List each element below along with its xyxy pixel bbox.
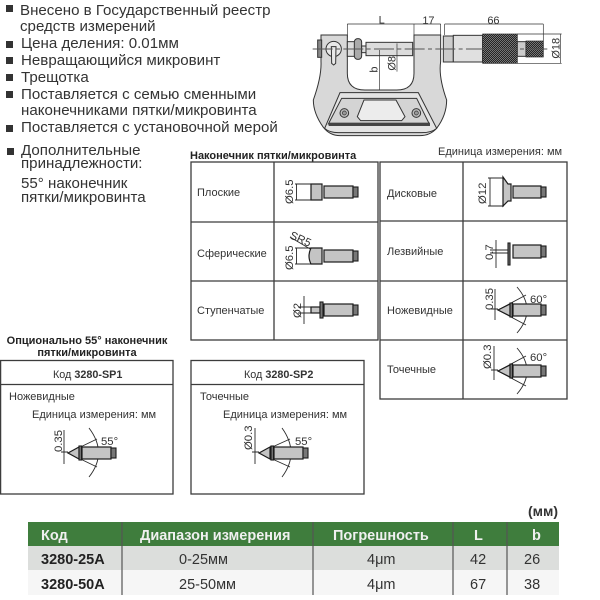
feature text: наконечниками пятки/микровинта [21, 102, 257, 119]
tip: blade: 0.7 [484, 244, 496, 260]
row 3280-50A [41, 577, 540, 593]
row 3280-50A: 3280-50A [41, 577, 105, 593]
tip: disc [387, 177, 546, 206]
table header [41, 528, 541, 544]
tip: flat [197, 180, 358, 204]
centre line [313, 47, 548, 50]
tip drawing SP1: 55° [101, 436, 118, 448]
tip: knife: 60° [530, 294, 547, 306]
dimension labels: Ø18 [550, 38, 562, 59]
features list [6, 2, 278, 206]
dimension labels: Ø8 [386, 56, 398, 71]
feature text: Поставляется с установочной мерой [21, 119, 278, 136]
tip: spherical: SR5 [288, 230, 313, 250]
row 3280-50A: 67 [470, 577, 486, 593]
optional tips heading: Опционально 55° наконечник [7, 335, 168, 347]
row 3280-25A: 42 [470, 552, 486, 568]
row 3280-50A: 25-50мм [179, 577, 236, 593]
tip: knife: 0.35 [484, 288, 496, 310]
dimension labels [369, 14, 562, 73]
row 3280-25A: 0-25мм [179, 552, 228, 568]
frame plate [325, 93, 437, 133]
tip drawing SP2: Ø0.3 [243, 426, 255, 450]
panel: option SP1 [0, 360, 173, 494]
dimension labels: b [369, 67, 381, 73]
panel: option SP2: Единица измерения: мм [223, 409, 347, 421]
tip: stepped: Ø2 [292, 303, 304, 318]
tip drawing SP2: 55° [295, 436, 312, 448]
feature text [20, 2, 278, 206]
panel: option SP1: Код 3280-SP1 [53, 369, 122, 381]
tip drawing SP2 [243, 426, 312, 477]
panel: option SP2 [191, 360, 364, 494]
dimension labels: L [379, 14, 385, 26]
feature text: Трещотка [21, 69, 89, 86]
tip: blade: Лезвийные [387, 246, 443, 258]
feature text: средств измерений [20, 18, 156, 35]
tip drawing SP1: 0.35 [53, 430, 65, 452]
tip: point: Точечные [387, 364, 436, 376]
tip: stepped: Ступенчатые [197, 305, 264, 317]
tip: point: 60° [530, 352, 547, 364]
specification table [28, 522, 559, 595]
feature text: принадлежности: [21, 155, 142, 172]
thimble [443, 36, 453, 62]
row 3280-50A: 4μm [367, 577, 396, 593]
spindle [347, 42, 355, 56]
tip: flat: Ø6.5 [284, 180, 296, 204]
unit label: (мм) [528, 503, 558, 519]
panel: option SP1: Единица измерения: мм [32, 409, 156, 421]
tip: disc: Ø12 [477, 183, 489, 204]
table header: Код [41, 528, 68, 544]
tip: point: Ø0.3 [482, 344, 494, 369]
feature text: Невращающийся микровинт [21, 52, 220, 69]
tip: spherical: Сферические [197, 248, 267, 260]
feature text: Внесено в Государственный реестр [20, 2, 271, 19]
tip: spherical [197, 230, 358, 270]
tip: knife: Ножевидные [387, 305, 453, 317]
dimension lines [347, 24, 562, 90]
optional tips heading: пятки/микровинта [37, 347, 138, 359]
row 3280-25A: 4μm [367, 552, 396, 568]
micrometer drawing [313, 14, 562, 136]
row 3280-25A: 3280-25A [41, 552, 105, 568]
table header: b [532, 528, 541, 544]
unit note: Единица измерения: мм [438, 146, 562, 158]
feature text: Поставляется с семью сменными [21, 86, 256, 103]
row 3280-25A: 26 [524, 552, 540, 568]
tip: knife [387, 287, 547, 333]
row 3280-25A [41, 552, 540, 568]
feature text: Цена деления: 0.01мм [21, 35, 179, 52]
dimension labels: 66 [487, 15, 500, 27]
tip: disc: Дисковые [387, 188, 437, 200]
feature text: Дополнительные [21, 142, 140, 159]
panel: option SP2: Код 3280-SP2 [244, 369, 313, 381]
panel: left tips table [191, 162, 378, 340]
feature text: пятки/микровинта [21, 189, 146, 206]
tips table heading: Наконечник пятки/микровинта [190, 150, 357, 162]
frame [313, 35, 447, 136]
dimension labels: 17 [422, 15, 435, 27]
anvil and lock [318, 40, 322, 57]
row 3280-50A: 38 [524, 577, 540, 593]
table header: L [474, 528, 483, 544]
bullet squares [6, 5, 14, 155]
tip: stepped [197, 296, 358, 324]
table header: Диапазон измерения [140, 528, 290, 544]
optional tips heading [7, 335, 168, 359]
tip: spherical: Ø6.5 [284, 246, 296, 270]
tip: point [387, 344, 547, 394]
panel: option SP1: Ножевидные [9, 391, 75, 403]
panel: option SP2: Точечные [200, 391, 249, 403]
tip: blade [387, 240, 546, 268]
tip drawing SP1 [53, 428, 118, 477]
feature text: 55° наконечник [21, 175, 128, 192]
panel: right tips table [380, 162, 567, 399]
tip: flat: Плоские [197, 187, 240, 199]
table header: Погрешность [333, 528, 429, 544]
